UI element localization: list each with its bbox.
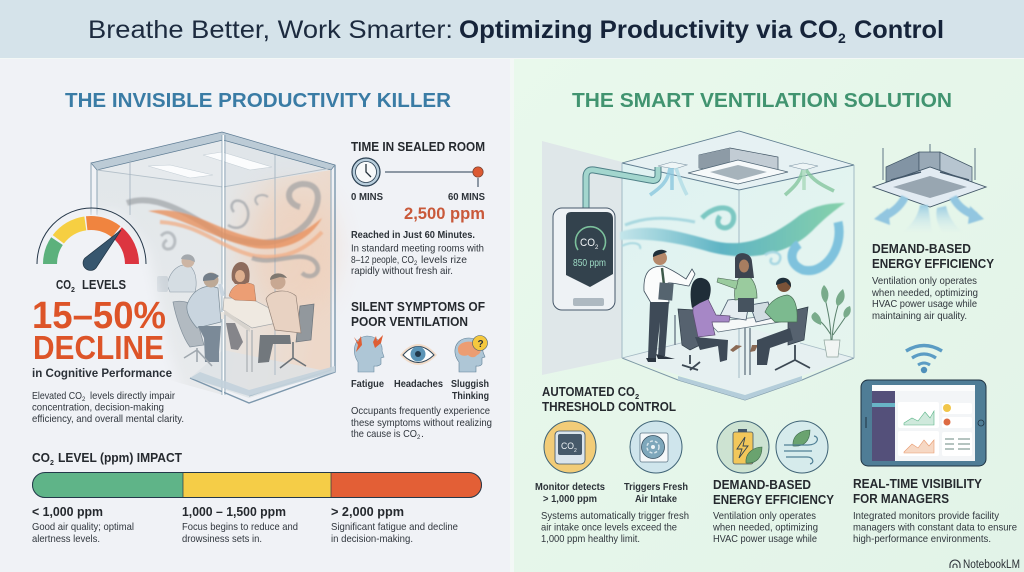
- text: cognitive impact description: concentration, decision-making: [32, 402, 164, 414]
- scale item: good: < 1,000 ppm: [32, 505, 103, 519]
- chart: CO2 level impact scale: CO: [32, 451, 50, 465]
- title banner: Optimizing Productivity via CO: [459, 16, 838, 44]
- section: time in sealed room: 0 MINS: [351, 191, 383, 203]
- person: seated woman: [678, 278, 730, 370]
- section: silent symptoms: [351, 300, 492, 441]
- CO2 monitor device: 2: [595, 245, 599, 251]
- text: cognitive impact description: Elevated CO: [32, 390, 82, 402]
- icon: sluggish brain: [455, 336, 488, 372]
- CO2 monitor device: CO: [580, 237, 595, 249]
- section: automated threshold control: air intake once levels exceed the: [541, 522, 677, 534]
- person: back left: [157, 254, 196, 292]
- icon: ceiling cassette with airflow: [873, 144, 986, 232]
- person: right man: [258, 273, 314, 368]
- icon: battery leaf circle: [717, 421, 769, 473]
- icon: fan circle: [630, 421, 682, 473]
- illustration: ventilated meeting room: [542, 131, 854, 400]
- scale item: high: Significant fatigue and decline: [331, 521, 458, 533]
- text: demand-based energy efficiency upper: HVAC power usage while: [872, 298, 977, 310]
- section: automated threshold control: THRESHOLD CONTROL: [542, 399, 676, 414]
- title banner: [0, 0, 1024, 58]
- scale item: good: alertness levels.: [32, 533, 100, 545]
- scale item: moderate: 1,000 – 1,500 ppm: [182, 505, 286, 519]
- section: time in sealed room: 8–12 people, CO: [351, 254, 414, 266]
- section: time in sealed room: 2,500 ppm: [404, 204, 485, 223]
- CO2 monitor device: 850 ppm: [573, 257, 606, 269]
- text: demand-based energy efficiency lower: Ventilation only operates: [713, 510, 816, 522]
- air wave swirls: [620, 203, 845, 271]
- icon: clock: [352, 158, 380, 186]
- section: silent symptoms: Headaches: [394, 378, 443, 390]
- section: silent symptoms: .: [421, 428, 424, 440]
- person: woman: [226, 262, 256, 350]
- label: CO2 levels: 2: [71, 287, 75, 294]
- section: automated threshold control: [535, 384, 828, 545]
- icon: monitor circle: [544, 421, 596, 473]
- label: CO2 levels: CO: [56, 278, 71, 292]
- text: demand-based energy efficiency upper: when needed, optimizing: [871, 287, 978, 299]
- air arrows: [650, 168, 834, 195]
- fade behind left text: [0, 212, 184, 445]
- text: demand-based energy efficiency upper: DEMAND-BASED: [872, 241, 971, 256]
- section: time in sealed room: levels rize: [421, 254, 467, 266]
- section: automated threshold control: 2: [635, 392, 639, 401]
- chart: CO2 level impact scale: 2: [50, 460, 54, 467]
- icon: sluggish brain: ?: [478, 339, 484, 350]
- bar: three-colour scale: [32, 472, 482, 498]
- section: automated threshold control: > 1,000 ppm: [543, 493, 597, 505]
- text: demand-based energy efficiency lower: [712, 477, 834, 545]
- text: demand-based energy efficiency lower: DEMAND-BASED: [713, 477, 811, 492]
- label: CO2 levels: LEVELS: [82, 278, 126, 292]
- scale item: high: in decision-making.: [331, 533, 413, 545]
- section: silent symptoms: Fatigue: [351, 378, 384, 390]
- title banner: Breathe Better, Work Smarter:: [88, 16, 453, 44]
- scale item: good: [32, 505, 134, 545]
- section: time in sealed room: TIME IN SEALED ROOM: [351, 140, 485, 154]
- light panels: [148, 165, 213, 178]
- text: real-time visibility: REAL-TIME VISIBILITY: [853, 476, 982, 491]
- text: demand-based energy efficiency upper: ENERGY EFFICIENCY: [872, 256, 994, 271]
- section: silent symptoms: SILENT SYMPTOMS OF: [351, 300, 485, 314]
- illustration: sealed meeting room: [91, 132, 335, 403]
- person: front left: [173, 272, 223, 366]
- text: real-time visibility: [853, 476, 1017, 545]
- big stat: 15-50% decline: [32, 295, 172, 380]
- icon: monitor circle: 2: [574, 448, 577, 454]
- CO2 monitor device: [553, 208, 615, 310]
- scale item: moderate: drowsiness sets in.: [182, 533, 262, 545]
- big stat: 15-50% decline: in Cognitive Performance: [32, 366, 172, 380]
- ceiling: [622, 131, 854, 190]
- section: silent symptoms: Thinking: [452, 390, 489, 402]
- text: cognitive impact description: efficiency, and overall mental clarity.: [32, 413, 184, 425]
- section: automated threshold control: AUTOMATED CO: [542, 384, 635, 399]
- section: time in sealed room: [351, 140, 485, 277]
- label: CO2 levels: [56, 278, 126, 294]
- text: demand-based energy efficiency upper: [871, 241, 994, 322]
- icon: wifi: [906, 346, 942, 373]
- plant: [811, 285, 851, 357]
- icon: tablet dashboard: [861, 380, 986, 466]
- text: cognitive impact description: 2: [82, 397, 86, 403]
- section: silent symptoms: Sluggish: [451, 378, 489, 390]
- section: time in sealed room: rapidly without fresh air.: [351, 265, 453, 277]
- big stat: 15-50% decline: 15–50%: [32, 295, 166, 337]
- section: automated threshold control: Air Intake: [635, 493, 677, 505]
- text: real-time visibility: high-performance environments.: [853, 533, 991, 545]
- section: silent symptoms: POOR VENTILATION: [351, 315, 468, 329]
- text: demand-based energy efficiency upper: maintaining air quality.: [872, 310, 967, 322]
- duct: [586, 167, 658, 210]
- section: automated threshold control: Monitor detects: [535, 481, 605, 493]
- section: automated threshold control: 1,000 ppm healthy limit.: [541, 533, 640, 545]
- title banner: Control: [854, 16, 944, 44]
- scale item: moderate: Focus begins to reduce and: [182, 521, 298, 533]
- section: silent symptoms: the cause is CO: [351, 428, 417, 440]
- right panel heading: THE SMART VENTILATION SOLUTION: [572, 89, 952, 112]
- person: standing woman: [717, 253, 758, 352]
- text: cognitive impact description: levels directly impair: [90, 390, 175, 402]
- text: demand-based energy efficiency upper: Ventilation only operates: [872, 275, 977, 287]
- section: automated threshold control: Systems automatically trigger fresh: [541, 510, 689, 522]
- scale item: high: [331, 505, 458, 545]
- person: seated man: [757, 278, 810, 370]
- text: cognitive impact description: [32, 390, 184, 425]
- section: silent symptoms: Occupants frequently experience: [351, 405, 490, 417]
- icon: monitor circle: CO: [561, 441, 574, 451]
- text: demand-based energy efficiency lower: when needed, optimizing: [712, 522, 818, 534]
- scale item: high: > 2,000 ppm: [331, 505, 404, 519]
- section: time in sealed room: In standard meeting rooms with: [351, 242, 484, 254]
- title banner: 2: [838, 30, 846, 46]
- text: real-time visibility: Integrated monitors provide facility: [853, 510, 1000, 522]
- text: demand-based energy efficiency lower: HVAC power usage while: [713, 533, 817, 545]
- section: automated threshold control: Triggers Fresh: [624, 481, 688, 493]
- timeline: [385, 167, 483, 187]
- icon: leaf wind circle: [776, 421, 828, 473]
- smoke swirls: [127, 184, 322, 276]
- scale item: good: Good air quality; optimal: [32, 521, 134, 533]
- text: real-time visibility: FOR MANAGERS: [853, 491, 949, 506]
- ceiling cassette unit: [658, 148, 818, 184]
- icon: fatigue head: [354, 335, 384, 372]
- chart: CO2 level impact scale: LEVEL (ppm) IMPACT: [58, 451, 182, 465]
- icon: eye: [400, 344, 437, 365]
- room frame: [91, 132, 335, 170]
- left panel heading: THE INVISIBLE PRODUCTIVITY KILLER: [65, 89, 451, 112]
- person: standing man: [644, 250, 695, 362]
- section: time in sealed room: 60 MINS: [448, 191, 485, 203]
- section: time in sealed room: Reached in Just 60 Minutes.: [351, 229, 475, 241]
- table and laptops: [675, 298, 780, 375]
- big stat: 15-50% decline: DECLINE: [33, 329, 164, 366]
- gauge: CO2 levels: [37, 208, 146, 270]
- chart: CO2 level impact scale: [32, 451, 482, 545]
- panel: the smart ventilation solution: [514, 59, 1024, 572]
- section: silent symptoms: these symptoms without realizing: [351, 417, 492, 429]
- wall: [542, 141, 622, 375]
- section: silent symptoms: 2: [417, 435, 421, 441]
- section: time in sealed room: 2: [414, 261, 418, 267]
- scale item: moderate: [182, 505, 298, 545]
- panel: the invisible productivity killer: [0, 59, 510, 572]
- table: [205, 298, 292, 372]
- text: demand-based energy efficiency lower: ENERGY EFFICIENCY: [713, 492, 834, 507]
